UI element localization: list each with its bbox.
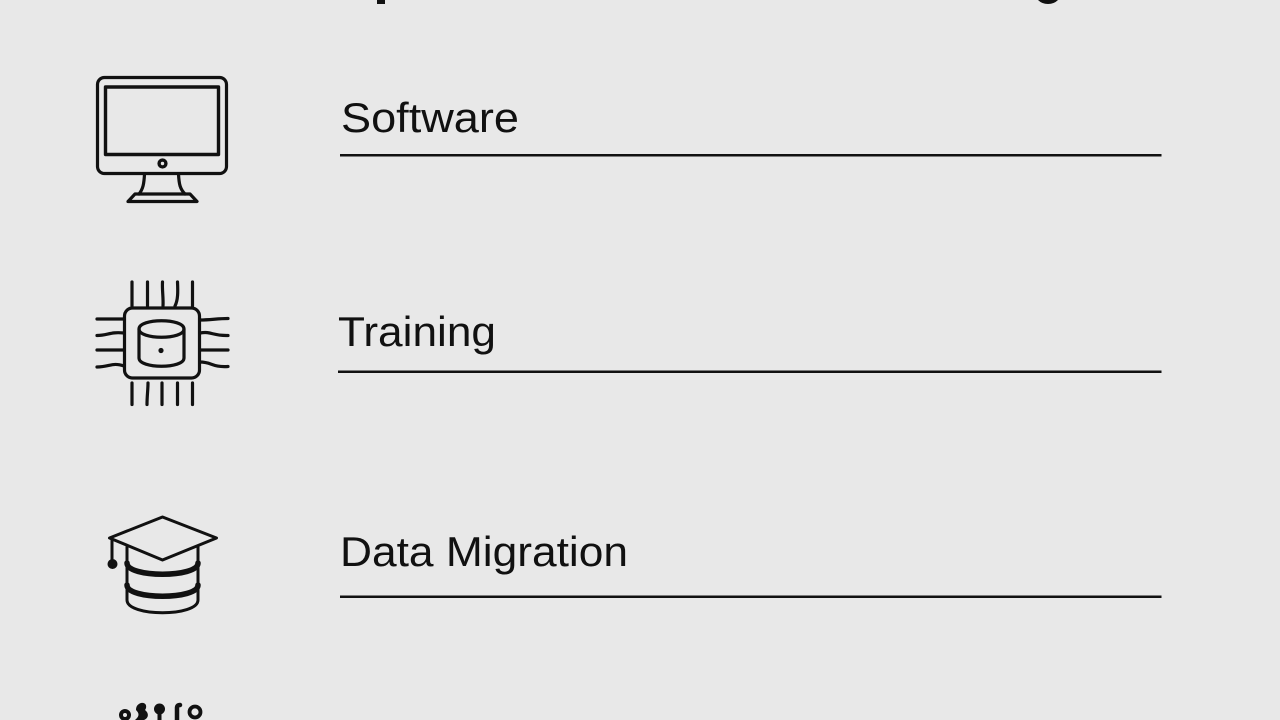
icon: chip with database bbox=[97, 282, 228, 404]
row: Training label and rule: Training bbox=[338, 308, 496, 355]
title: cropped descenders at the top edge bbox=[377, 0, 1058, 4]
icon: graduation cap on database bbox=[108, 517, 216, 613]
row: Data Migration label and rule: Data Migration bbox=[340, 528, 628, 575]
icon: cropped row of pins at the bottom edge bbox=[121, 703, 200, 720]
icon: desktop monitor bbox=[98, 78, 226, 202]
row: Software label and rule: Software bbox=[341, 94, 519, 141]
